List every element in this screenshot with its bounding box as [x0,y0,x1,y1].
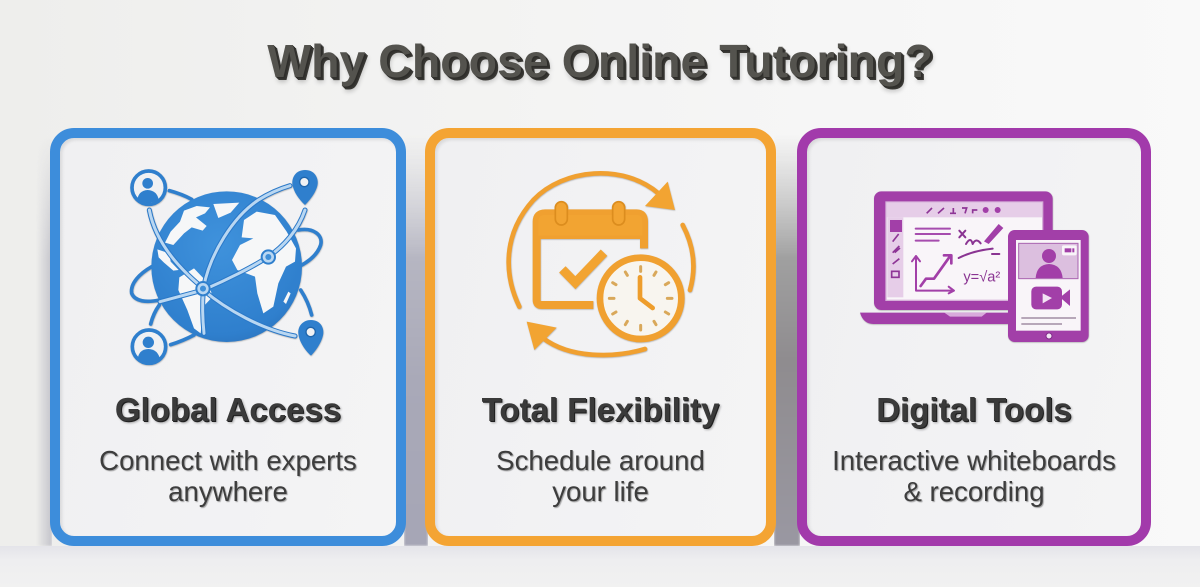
map pin top right [292,170,318,205]
heading: global access: Global Access [115,391,341,428]
continents [157,203,296,333]
title: Why Choose Online Tutoring? [267,35,933,87]
panel: total flexibility [425,128,776,546]
connection arcs [149,186,305,336]
tablet person [1042,249,1056,263]
whiteboard text lines [916,229,950,241]
video icon [1031,287,1062,309]
tablet text lines [1021,318,1076,324]
text: total flexibility description: Schedule around [496,445,705,476]
text: digital tools description: & recording [903,476,1045,507]
text: global access description: anywhere [168,476,288,507]
laptop screen [874,191,1053,310]
panel: global access [50,128,406,546]
text: global access description [99,445,358,508]
text: digital tools description: Interactive whiteboards [832,445,1116,476]
calendar [537,213,644,305]
text: global access description: Connect with experts [99,445,357,476]
globe [151,191,302,342]
icon: globe network [131,170,323,363]
tablet [1008,230,1089,342]
hub nodes [196,250,275,295]
map pin bottom right [298,320,323,356]
person badge bottom left [132,330,166,363]
cycle arrows [509,173,693,355]
pen and scribble [959,231,999,258]
check mark [562,253,604,283]
camera bubble [1062,245,1077,255]
icon: laptop and tablet [860,191,1089,342]
laptop base [860,313,1023,324]
text: total flexibility description [496,445,705,508]
heading: total flexibility: Total Flexibility [482,391,719,428]
person badge top left [132,171,165,204]
heading: digital tools: Digital Tools [876,391,1072,428]
orbit rings [131,191,321,345]
whiteboard toolbars [887,203,1042,217]
icon: calendar and clock [509,173,693,355]
panel: digital tools [797,128,1151,546]
chart arrow [912,255,954,293]
text: digital tools description [832,445,1116,508]
equation: y=√a² [963,270,1000,286]
text: total flexibility description: your life [552,476,649,507]
clock [600,258,681,339]
calendar rings [555,202,625,225]
